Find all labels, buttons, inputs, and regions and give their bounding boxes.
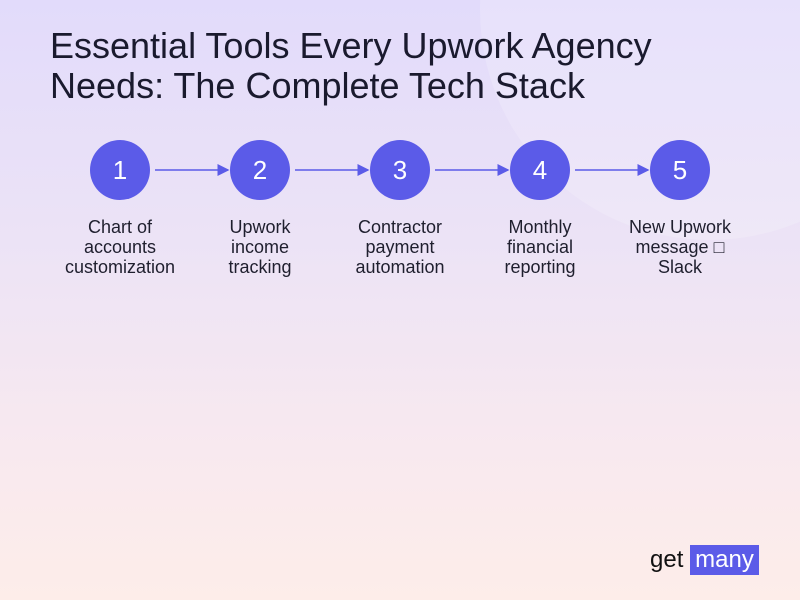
label 4	[504, 217, 576, 277]
label 5: New Upwork	[629, 217, 731, 237]
label 3: payment	[365, 237, 435, 257]
label 3	[355, 217, 445, 277]
step 5: 5	[673, 155, 687, 185]
step 4: 4	[533, 155, 547, 185]
label 1: Chart of	[88, 217, 152, 237]
label 1: accounts	[84, 237, 156, 257]
label 2: Upwork	[229, 217, 290, 237]
step 3	[370, 140, 430, 200]
step 2	[230, 140, 290, 200]
label 4: reporting	[504, 257, 576, 277]
label 2	[228, 217, 292, 277]
label 3: Contractor	[358, 217, 442, 237]
label 4: financial	[507, 237, 573, 257]
title: Essential Tools Every Upwork Agency Needs: The Complete Tech Stack	[50, 25, 652, 106]
label 5: message □	[636, 237, 724, 257]
logo: many	[695, 546, 754, 573]
label 5: Slack	[658, 257, 702, 277]
label 1	[65, 217, 175, 277]
label 1: customization	[65, 257, 175, 277]
step 1: 1	[113, 155, 127, 185]
logo	[650, 545, 759, 575]
label 4: Monthly	[508, 217, 572, 237]
logo: get	[650, 546, 683, 573]
label 2: income	[231, 237, 289, 257]
step 4	[510, 140, 570, 200]
step 5	[650, 140, 710, 200]
label 5	[629, 217, 731, 277]
label 3: automation	[355, 257, 445, 277]
step 2: 2	[253, 155, 267, 185]
label 2: tracking	[228, 257, 292, 277]
step 3: 3	[393, 155, 407, 185]
step 1	[90, 140, 150, 200]
